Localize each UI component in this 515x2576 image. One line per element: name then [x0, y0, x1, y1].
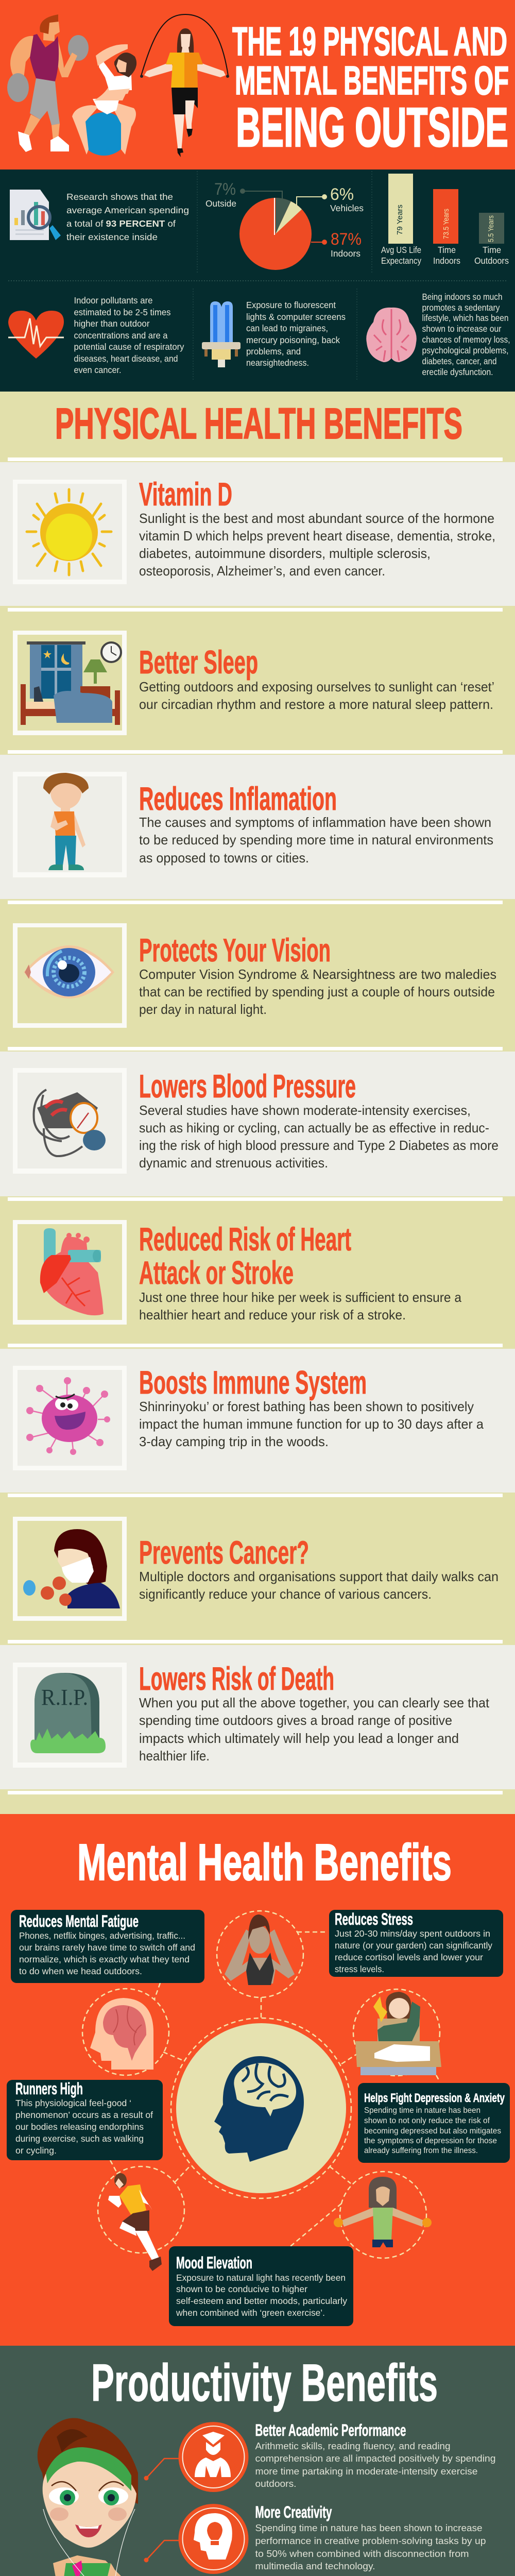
- text: lowers blood pressure: ing the risk of high blood pressure and Type 2 Diabetes as more: [139, 1138, 499, 1153]
- illustration: woman on exercise ball: [72, 44, 136, 156]
- text: better sleep: our circadian rhythm and restore a more natural sleep pattern.: [139, 697, 493, 712]
- text: more creativity: [255, 2503, 486, 2571]
- illustration: central head with brain: [176, 2023, 346, 2193]
- text: better sleep: Getting outdoors and exposing ourselves to sunlight can ‘reset’: [139, 679, 494, 694]
- callout: reduces mental fatigue: [11, 1910, 204, 1983]
- text: reduces inflammation: to be reduced by spending more time in natural environments: [139, 832, 493, 848]
- title: [232, 19, 509, 158]
- panel: indoor statistics: [0, 170, 515, 392]
- icon: girl with face mask: [23, 1529, 120, 1608]
- icon: anatomical heart: [40, 1228, 104, 1315]
- text: protects your vision: Protects Your Vision: [139, 933, 331, 969]
- card: protects your vision: [13, 923, 496, 1028]
- text: more creativity: Spending time in nature has been shown to increase: [255, 2522, 482, 2533]
- illustration: runner girl: [38, 2418, 138, 2576]
- bar chart: years indoors and outdoors: Time: [483, 245, 501, 255]
- card: prevents cancer: [13, 1517, 499, 1621]
- text: lowers blood pressure: Lowers Blood Pressure: [139, 1069, 356, 1105]
- callout: runners high: Runners High: [15, 2079, 83, 2098]
- text: lowers blood pressure: such as hiking or cycling, can actually be as effective in reduc-: [139, 1120, 489, 1136]
- text: boosts immune system: Shinrinyoku’ or forest bathing has been shown to positively: [139, 1399, 474, 1414]
- callout: runners high: or cycling.: [15, 2145, 57, 2156]
- icon: fluorescent bulb: [202, 301, 241, 367]
- bar chart: years indoors and outdoors: 73.5 Years: [442, 209, 451, 239]
- callout: mood elevation: [169, 2246, 353, 2326]
- text: lowers risk of death: When you put all the above together, you can clearly see that: [139, 1695, 490, 1710]
- illustration: man with dumbbells: [7, 14, 89, 152]
- text: protects your vision: that can be rectified by spending just a couple of hours outside: [139, 984, 495, 999]
- text: better academic performance: Arithmetic skills, reading fluency, and reading: [255, 2441, 450, 2451]
- text: lowers blood pressure: Several studies have shown moderate-intensity exercises,: [139, 1103, 471, 1118]
- text: better academic performance: [255, 2421, 495, 2489]
- text: prevents cancer: Multiple doctors and organisations support that daily walks can: [139, 1569, 499, 1584]
- bar chart: years indoors and outdoors: Outdoors: [474, 256, 509, 266]
- callout: reduces mental fatigue: our brains rarely have time to switch off and: [19, 1942, 195, 1953]
- callout: helps fight depression and anxiety: shown to not only reduce the risk of: [364, 2116, 490, 2125]
- text: reduced risk of heart attack or stroke: healthier heart and reduce your risk of a stroke.: [139, 1307, 406, 1323]
- callout: reduces mental fatigue: normalize, which is exactly what they tend: [19, 1954, 190, 1964]
- icon: sun: [27, 489, 111, 575]
- text: better sleep: Better Sleep: [139, 645, 258, 681]
- callout: runners high: during exercise, such as walking: [15, 2133, 144, 2144]
- text: fluorescent lights: Exposure to fluorescent: [246, 300, 336, 310]
- callout: helps fight depression and anxiety: Spending time in nature has been: [364, 2106, 480, 2115]
- text: boosts immune system: 3-day camping trip in the woods.: [139, 1434, 329, 1449]
- text: indoor pollutants: Indoor pollutants are: [74, 295, 152, 306]
- text: reduced risk of heart attack or stroke: Just one three hour hike per week is sufficient to ensure a: [139, 1290, 461, 1305]
- text: fluorescent lights: [246, 300, 346, 368]
- panel: header: [0, 0, 515, 170]
- text: reduces inflammation: as opposed to towns or cities.: [139, 850, 309, 866]
- text: indoor pollutants: estimated to be 2-5 times: [74, 307, 171, 317]
- benefit: better academic performance: [144, 2421, 495, 2492]
- bar chart: years indoors and outdoors: Expectancy: [381, 256, 421, 266]
- callout: mood elevation: Mood Elevation: [176, 2253, 252, 2272]
- text: better academic performance: more time partaking in moderate-intensity exercise: [255, 2466, 478, 2477]
- illustration: stressed student at desk: [355, 1992, 441, 2075]
- icon: virus: [26, 1377, 110, 1455]
- callout: helps fight depression and anxiety: [358, 2083, 510, 2163]
- callout: mood elevation: self-esteem and better moods, particularly: [176, 2296, 347, 2306]
- card: vitamin D: [13, 477, 495, 584]
- text: lowers risk of death: [139, 1661, 490, 1764]
- text: more creativity: to 50% when combined with disconnection from: [255, 2548, 469, 2559]
- callout: reduces stress: nature (or your garden) can significantly: [335, 1940, 492, 1951]
- icon: gravestone: [30, 1673, 106, 1753]
- pie chart: where time is spent: 87%: [331, 230, 362, 248]
- text: indoor pollutants: diseases, heart disease, and: [74, 353, 178, 364]
- text: more creativity: performance in creative problem-solving tasks by up: [255, 2535, 486, 2546]
- callout: reduces mental fatigue: Phones, netflix binges, advertising, traffic...: [19, 1930, 185, 1941]
- text: sedentary lifestyle: erectile dysfunction.: [422, 367, 493, 377]
- bar chart: years indoors and outdoors: 79 Years: [396, 205, 404, 235]
- pie chart: where time is spent: 7%: [214, 180, 236, 198]
- connectors and dashed rings: [82, 1911, 440, 2258]
- illustration: runner: [108, 2173, 162, 2271]
- text: protects your vision: per day in natural light.: [139, 1002, 267, 1017]
- text: vitamin D: Sunlight is the best and most abundant source of the hormone: [139, 511, 494, 526]
- text: fluorescent lights: can lead to migraines,: [246, 323, 328, 333]
- illustration: woman with skipping rope: [140, 14, 229, 157]
- text: reduces inflammation: [139, 781, 493, 866]
- text: vitamin D: diabetes, autoimmune disorders, multiple sclerosis,: [139, 546, 431, 561]
- icon: eye: [24, 945, 114, 998]
- callout: mood elevation: Exposure to natural light has recently been: [176, 2273, 346, 2283]
- text: indoor pollutants: concentrations and are a: [74, 330, 168, 341]
- pie chart: where time is spent: [205, 180, 364, 270]
- bar chart: years indoors and outdoors: Indoors: [433, 256, 460, 266]
- card: lowers risk of death: [13, 1661, 490, 1768]
- text: indoor pollutants: potential cause of respiratory: [74, 342, 184, 352]
- text: research summary: Research shows that the: [66, 192, 173, 202]
- text: reduced risk of heart attack or stroke: [139, 1222, 461, 1323]
- icon: heart with pulse: [8, 311, 64, 359]
- text: prevents cancer: significantly reduce your chance of various cancers.: [139, 1586, 432, 1602]
- text: sedentary lifestyle: [422, 292, 510, 377]
- card: reduced risk of heart attack or stroke: [13, 1220, 461, 1325]
- text: research summary: their existence inside: [66, 232, 158, 242]
- text: vitamin D: [139, 477, 495, 579]
- text: better academic performance: Better Academic Performance: [255, 2421, 406, 2439]
- callout: reduces mental fatigue: to do when we head outdoors.: [19, 1966, 142, 1976]
- pie chart: where time is spent: Outside: [205, 198, 236, 209]
- icon: gravestone: R.I.P.: [41, 1685, 88, 1710]
- text: indoor pollutants: higher than outdoor: [74, 318, 150, 329]
- bar chart: years indoors and outdoors: Time: [438, 245, 456, 255]
- icon: report with magnifier: [10, 190, 61, 240]
- text: reduced risk of heart attack or stroke: Attack or Stroke: [139, 1255, 294, 1291]
- text: boosts immune system: [139, 1365, 484, 1449]
- bar chart: years indoors and outdoors: 5.5 Years: [487, 215, 495, 242]
- text: vitamin D: vitamin D which helps prevent heart disease, dementia, stroke,: [139, 528, 495, 544]
- text: better academic performance: comprehension are all impacted positively by spending: [255, 2453, 495, 2464]
- text: better sleep: [139, 645, 494, 712]
- pie chart: where time is spent: Indoors: [331, 248, 360, 259]
- text: protects your vision: [139, 933, 496, 1017]
- callout: runners high: This physiological feel-good ‘: [15, 2098, 131, 2108]
- text: prevents cancer: [139, 1535, 499, 1602]
- text: boosts immune system: Boosts Immune System: [139, 1365, 367, 1401]
- card: lowers blood pressure: [13, 1068, 499, 1174]
- text: research summary: average American spending: [66, 205, 189, 215]
- illustration: head profile with brain: [90, 1998, 153, 2070]
- text: lowers blood pressure: [139, 1069, 499, 1171]
- callout: helps fight depression and anxiety: becoming depressed but also mitigates: [364, 2127, 501, 2136]
- text: lowers risk of death: Lowers Risk of Death: [139, 1661, 334, 1697]
- text: research summary: [66, 192, 189, 242]
- callout: runners high: [7, 2079, 163, 2160]
- text: reduces inflammation: Reduces Inflamation: [139, 781, 337, 817]
- text: vitamin D: Vitamin D: [139, 477, 232, 513]
- text: protects your vision: Computer Vision Syndrome & Nearsightness are two maledies: [139, 967, 496, 982]
- bar chart: years indoors and outdoors: [381, 174, 509, 266]
- text: sedentary lifestyle: Being indoors so much: [422, 292, 503, 302]
- illustration: woman with headache: [225, 1914, 295, 1985]
- pie chart: where time is spent: Vehicles: [330, 203, 364, 213]
- text: indoor pollutants: [74, 295, 184, 375]
- panel: productivity benefits: [0, 2346, 515, 2576]
- text: fluorescent lights: problems, and: [246, 346, 301, 357]
- text: reduced risk of heart attack or stroke: Reduced Risk of Heart: [139, 1222, 351, 1258]
- callout: mood elevation: shown to be conducive to higher: [176, 2284, 307, 2294]
- callout: reduces stress: Reduces Stress: [335, 1910, 413, 1928]
- text: lowers risk of death: healthier life.: [139, 1748, 210, 1764]
- text: vitamin D: osteoporosis, Alzheimer’s, and even cancer.: [139, 563, 385, 579]
- icon: pink brain: [366, 308, 417, 362]
- text: more creativity: multimedia and technology.: [255, 2561, 375, 2571]
- text: more creativity: More Creativity: [255, 2503, 332, 2521]
- text: sedentary lifestyle: promotes a sedentary: [422, 302, 500, 313]
- callout: reduces stress: stress levels.: [335, 1964, 384, 1974]
- text: sedentary lifestyle: diabetes, cancer, and: [422, 356, 496, 366]
- text: fluorescent lights: nearsightedness.: [246, 358, 309, 368]
- callout: helps fight depression and anxiety: already suffering from the illness.: [364, 2146, 478, 2155]
- icon: bedroom: [21, 641, 122, 725]
- text: prevents cancer: Prevents Cancer?: [139, 1535, 309, 1571]
- text: better academic performance: outdoors.: [255, 2478, 297, 2489]
- text: lowers risk of death: spending time outdoors gives a broad range of positive: [139, 1713, 452, 1728]
- callout: runners high: phenomenon’ occurs as a result of: [15, 2110, 153, 2120]
- callout: helps fight depression and anxiety: the symptoms of depression for those: [364, 2137, 497, 2145]
- text: fluorescent lights: mercury poisoning, back: [246, 335, 340, 345]
- text: boosts immune system: impact the human immune function for up to 30 days after a: [139, 1416, 484, 1432]
- illustration: woman with orange weights: [334, 2177, 432, 2247]
- text: fluorescent lights: lights & computer screens: [246, 312, 346, 322]
- card: better sleep: [13, 631, 494, 735]
- panel: physical health benefits: [0, 392, 515, 1814]
- callout: reduces stress: [329, 1910, 503, 1977]
- card: boosts immune system: [13, 1365, 484, 1470]
- card: reduces inflammation: [13, 772, 493, 877]
- text: lowers risk of death: impacts which ultimately will help you lead a longer and: [139, 1731, 459, 1746]
- benefit: more creativity: [144, 2503, 486, 2574]
- text: reduces inflammation: The causes and symptoms of inflammation have been shown: [139, 815, 491, 830]
- text: research summary: a total of 93 PERCENT of: [66, 218, 176, 229]
- callout: reduces mental fatigue: Reduces Mental Fatigue: [19, 1912, 139, 1930]
- callout: mood elevation: when combined with ‘green exercise’.: [176, 2308, 325, 2318]
- pie chart: where time is spent: 6%: [330, 185, 354, 204]
- bar chart: years indoors and outdoors: Avg US Life: [381, 245, 421, 255]
- callout: reduces stress: Just 20-30 mins/day spent outdoors in: [335, 1928, 490, 1939]
- callout: reduces stress: reduce cortisol levels and lower your: [335, 1952, 483, 1962]
- callout: runners high: our bodies releasing endorphins: [15, 2122, 144, 2132]
- text: lowers blood pressure: dynamic and strenuous activities.: [139, 1155, 328, 1171]
- text: indoor pollutants: even cancer.: [74, 365, 122, 375]
- icon: boy with sore throat: [43, 773, 89, 870]
- icon: blood pressure monitor: [34, 1090, 106, 1156]
- text: sedentary lifestyle: shown to increase our: [422, 324, 502, 334]
- panel: mental health benefits: [0, 1814, 515, 2346]
